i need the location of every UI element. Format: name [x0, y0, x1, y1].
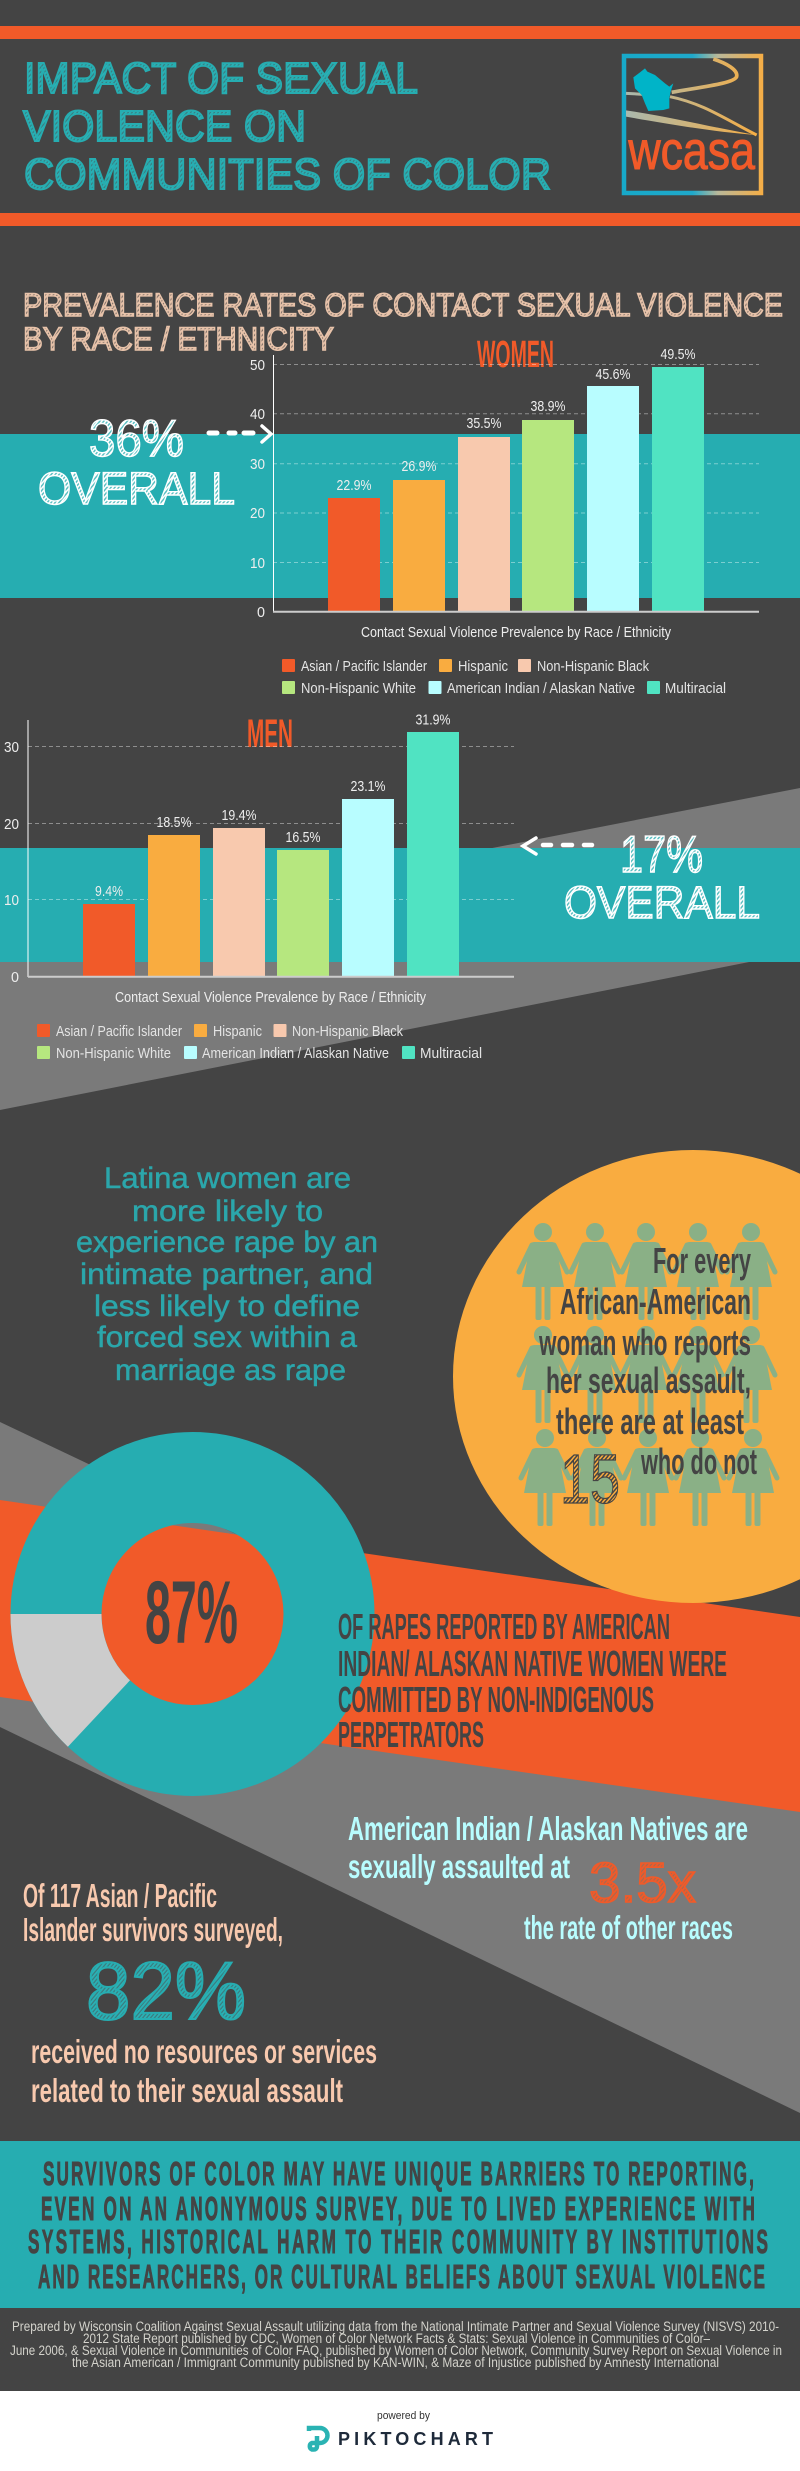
legend: women: American Indian / Alaskan Native: [447, 681, 635, 697]
icon: rows of women: [519, 1223, 777, 1526]
footer: powered by piktochart: PIKTOCHART: [338, 2429, 493, 2449]
bar chart: men: [4, 712, 514, 1006]
heading: men: MEN: [247, 712, 293, 756]
text block: rapes reported: [338, 1606, 727, 1755]
arrow: to women chart: [209, 426, 271, 442]
text block: american indian rate: [348, 1810, 748, 1946]
callout: 36% overall: [38, 410, 235, 514]
bottom orange bar: [0, 213, 800, 226]
gray diagonal band: men: [0, 788, 800, 1110]
y axis labels: 10: [250, 556, 265, 572]
text block: asian pacific islander survivors: received no resources or services: [31, 2033, 377, 2070]
legend: men: [37, 1024, 482, 1062]
text block: latina women: Latina women are: [104, 1162, 351, 1195]
bar: multiracial: 31.9%: [416, 712, 451, 728]
bar: asian pacific islander: [83, 884, 135, 976]
legend: men: Non-Hispanic White: [56, 1046, 171, 1062]
legend: men: Asian / Pacific Islander: [56, 1024, 182, 1040]
logo: wcasa: [624, 56, 761, 193]
bar: non-hispanic white: 16.5%: [286, 830, 321, 846]
gray diagonal band: lower: [0, 1422, 800, 2113]
number: 82%: 82%: [86, 1946, 246, 2037]
bar: non-hispanic black: 19.4%: [222, 808, 257, 824]
bar: non-hispanic white: 38.9%: [530, 399, 566, 415]
legend: women: Multiracial: [665, 681, 726, 697]
title: VIOLENCE ON: [23, 102, 306, 151]
legend: men: Multiracial: [420, 1046, 482, 1062]
legend: women: [282, 659, 726, 697]
legend: women: Non-Hispanic White: [301, 681, 416, 697]
callout: 17% overall: OVERALL: [564, 877, 760, 928]
bar: asian pacific islander: [328, 478, 380, 611]
barriers text: EVEN ON AN ANONYMOUS SURVEY, DUE TO LIVED EXPERIENCE WITH: [41, 2190, 755, 2228]
callout: 17% overall: [564, 826, 760, 928]
legend: men: Hispanic: [213, 1024, 262, 1040]
y axis labels: 40: [250, 407, 265, 423]
header band: [0, 26, 800, 226]
bar: multiracial: 49.5%: [660, 347, 696, 363]
bar: american indian alaskan native: 23.1%: [350, 779, 386, 795]
bar: american indian alaskan native: 45.6%: [596, 367, 631, 383]
icon: piktochart logo: [309, 2428, 328, 2450]
bar: non-hispanic black: [458, 416, 510, 611]
y axis labels: 50: [250, 358, 265, 374]
y axis labels: 20: [250, 506, 265, 522]
text block: latina women: forced sex within a: [97, 1321, 357, 1354]
text block: asian pacific islander survivors: related to their sexual assault: [31, 2072, 343, 2109]
title: COMMUNITIES OF COLOR: [24, 150, 551, 199]
text block: asian pacific islander survivors: [23, 1877, 377, 2109]
bar: non-hispanic white: [522, 399, 574, 611]
bar: multiracial: [652, 347, 704, 611]
text block: asian pacific islander survivors: Islander survivors surveyed,: [23, 1911, 283, 1948]
text block: american indian rate: sexually assaulted at: [348, 1848, 570, 1885]
slice: remaining 13%: [10, 1614, 130, 1747]
arrow: to men chart: [523, 838, 592, 854]
barriers text: SYSTEMS, HISTORICAL HARM TO THEIR COMMUNITY BY INSTITUTIONS: [28, 2223, 768, 2261]
y axis labels: 20: [4, 817, 19, 833]
text block: latina women: intimate partner, and: [80, 1258, 373, 1291]
heading: prevalence rates: [23, 287, 783, 357]
text block: sources: the Asian American / Immigrant Community published by KAN-WIN, & Maze of Injustice published by Amnesty International: [72, 2355, 719, 2370]
heading: prevalence rates: BY RACE / ETHNICITY: [23, 321, 334, 357]
text block: asian pacific islander survivors: Of 117 Asian / Pacific: [23, 1877, 217, 1914]
barriers text: [28, 2155, 768, 2296]
bar: asian pacific islander: 22.9%: [336, 478, 372, 494]
bar: american indian alaskan native: [587, 367, 639, 611]
band: men overall: [0, 848, 800, 962]
y axis labels: 30: [250, 457, 265, 473]
text block: latina women: more likely to: [132, 1195, 323, 1228]
top orange bar: [0, 26, 800, 39]
axes: [272, 355, 274, 612]
text block: latina women: marriage as rape: [115, 1354, 346, 1387]
number: 3.5x: 3.5x: [589, 1851, 696, 1915]
callout: 36% overall: 36%: [89, 410, 184, 468]
legend: men: American Indian / Alaskan Native: [202, 1046, 389, 1062]
panel: african-american statistic circle: [453, 1150, 800, 1603]
legend: women: Non-Hispanic Black: [537, 659, 650, 675]
y axis labels: [4, 740, 19, 986]
axes: [27, 720, 29, 977]
y axis labels: 0: [11, 970, 19, 986]
bar: asian pacific islander: 9.4%: [95, 884, 123, 900]
heading: women: WOMEN: [477, 334, 554, 376]
logo: wcasa: wcasa: [627, 122, 755, 181]
text block: rapes reported: PERPETRATORS: [338, 1714, 484, 1755]
bar: multiracial: [407, 712, 459, 976]
barriers text: SURVIVORS OF COLOR MAY HAVE UNIQUE BARRIERS TO REPORTING,: [43, 2155, 754, 2193]
title: IMPACT OF SEXUAL: [24, 54, 418, 103]
text block: latina women: experience rape by an: [76, 1226, 378, 1259]
text block: latina women: [76, 1162, 378, 1387]
y axis labels: 0: [257, 605, 265, 621]
bar: hispanic: [393, 459, 445, 611]
barriers text: AND RESEARCHERS, OR CULTURAL BELIEFS ABOUT SEXUAL VIOLENCE: [38, 2258, 765, 2296]
bar: hispanic: 18.5%: [156, 815, 192, 831]
text block: sources: [10, 2319, 782, 2370]
y axis labels: 10: [4, 893, 19, 909]
bar: non-hispanic black: [213, 808, 265, 976]
x axis title: Contact Sexual Violence Prevalence by Race / Ethnicity: [361, 625, 672, 641]
band: women overall: [0, 434, 800, 598]
donut label: 87%: [145, 1562, 238, 1662]
bar: hispanic: 26.9%: [402, 459, 437, 475]
text block: sources: 2012 State Report published by CDC, Women of Color Network Facts & Stats: Sexual Violence in Communities of Color–: [83, 2331, 710, 2346]
bar: american indian alaskan native: [342, 779, 394, 976]
bar chart: women: [250, 347, 759, 641]
footer: powered by piktochart: powered by: [377, 2410, 430, 2422]
y axis labels: [250, 358, 265, 621]
bar: non-hispanic white: [277, 830, 329, 976]
legend: women: Hispanic: [458, 659, 508, 675]
number: 15: 15: [560, 1440, 620, 1518]
legend: women: Asian / Pacific Islander: [301, 659, 427, 675]
panel: survivors of color: [0, 2141, 800, 2308]
x axis title: Contact Sexual Violence Prevalence by Race / Ethnicity: [115, 990, 427, 1006]
donut chart: 87%: [10, 1478, 329, 1750]
footer: powered by piktochart: [0, 2391, 800, 2471]
bar: hispanic: [148, 815, 200, 976]
legend: men: Non-Hispanic Black: [292, 1024, 404, 1040]
statistic text: [538, 1240, 757, 1482]
text block: latina women: less likely to define: [94, 1290, 360, 1323]
orange diagonal band: [0, 1500, 800, 1812]
callout: 36% overall: OVERALL: [38, 463, 235, 514]
y axis labels: 30: [4, 740, 19, 756]
title: [23, 54, 551, 199]
callout: 17% overall: 17%: [620, 826, 703, 884]
bar: non-hispanic black: 35.5%: [466, 416, 502, 432]
